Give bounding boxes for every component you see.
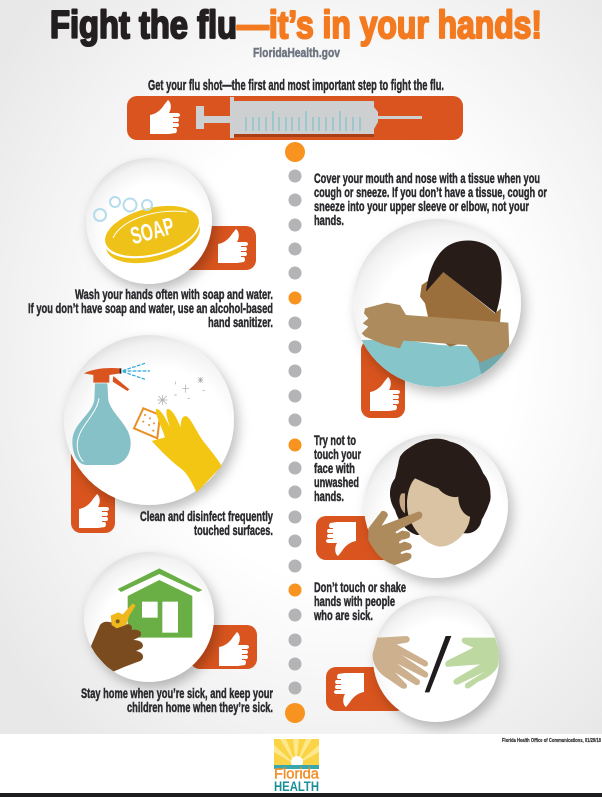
panel: soap	[86, 158, 256, 284]
text: clean surfaces	[140, 508, 273, 538]
text: stay home: children home when they’re sick.	[127, 699, 273, 715]
house	[128, 580, 192, 638]
spray mist	[123, 363, 150, 379]
illustration: person coughing	[362, 240, 510, 387]
text: stay home: Stay home when you’re sick, and keep your	[81, 685, 273, 701]
text: touch face: unwashed	[314, 474, 359, 490]
key	[111, 603, 136, 628]
roof	[118, 568, 202, 592]
illustration: house and key	[90, 568, 202, 672]
logo: Florida Health	[274, 739, 320, 794]
text: don't shake hands	[313, 579, 406, 623]
website: FloridaHealth.gov	[253, 45, 341, 60]
text: touch face	[314, 432, 361, 504]
panel: stay home	[84, 552, 257, 682]
text: wash hands: If you don’t have soap and water, use an alcohol-based	[28, 300, 273, 316]
text: cover mouth: hands.	[314, 212, 344, 228]
illustration: hands and slash	[373, 636, 499, 692]
hand	[90, 622, 143, 672]
timeline dots	[285, 142, 305, 723]
panel: touching face	[316, 434, 508, 578]
icon: thumbs up	[370, 377, 400, 411]
icon: soap bar: SOAP	[128, 213, 177, 250]
text: don't shake hands: Don’t touch or shake	[314, 579, 406, 595]
icon: thumbs up	[218, 229, 248, 263]
bottle	[72, 383, 131, 465]
text: cover mouth	[314, 170, 547, 228]
logo: Florida Health: HEALTH	[274, 778, 319, 794]
panel: no handshake	[326, 596, 499, 722]
icon: soap bar	[99, 197, 205, 272]
footer	[0, 734, 602, 797]
logo: Florida Health: Florida	[274, 766, 320, 782]
text: clean surfaces: Clean and disinfect frequently	[140, 508, 273, 524]
illustration: person touching face	[368, 439, 491, 565]
text: touch face: Try not to	[314, 432, 356, 448]
icon: bubbles	[94, 197, 152, 221]
title: —it’s in your hands!	[237, 4, 542, 47]
text: don't shake hands: who are sick.	[313, 607, 373, 623]
panel: flu shot bar	[127, 96, 463, 140]
text: wash hands	[28, 286, 273, 330]
text: wash hands: Wash your hands often with soap and water.	[75, 286, 273, 302]
glove	[152, 409, 222, 493]
text: wash hands: hand sanitizer.	[208, 314, 273, 330]
text: touch face: touch your	[314, 446, 361, 462]
windows	[142, 602, 158, 618]
title: Fight the flu	[50, 4, 237, 47]
illustration: spray bottle and glove	[72, 363, 222, 493]
text: don't shake hands: hands with people	[314, 593, 395, 609]
icon: thumbs down	[326, 522, 356, 556]
text: touch face: face with	[314, 460, 355, 476]
panel: clean surfaces	[64, 335, 234, 533]
icon: thumbs up	[79, 494, 109, 528]
sparkles	[157, 377, 205, 405]
text: touch face: hands.	[314, 488, 344, 504]
icon: thumbs down	[334, 673, 364, 707]
icon: thumbs up	[150, 100, 180, 134]
spray head	[84, 368, 120, 383]
icon: syringe	[196, 97, 422, 138]
text: clean surfaces: touched surfaces.	[194, 522, 273, 538]
sponge	[134, 408, 160, 438]
icon: thumbs up	[219, 632, 249, 666]
text: stay home	[81, 685, 273, 715]
panel: cough into elbow	[353, 219, 521, 418]
